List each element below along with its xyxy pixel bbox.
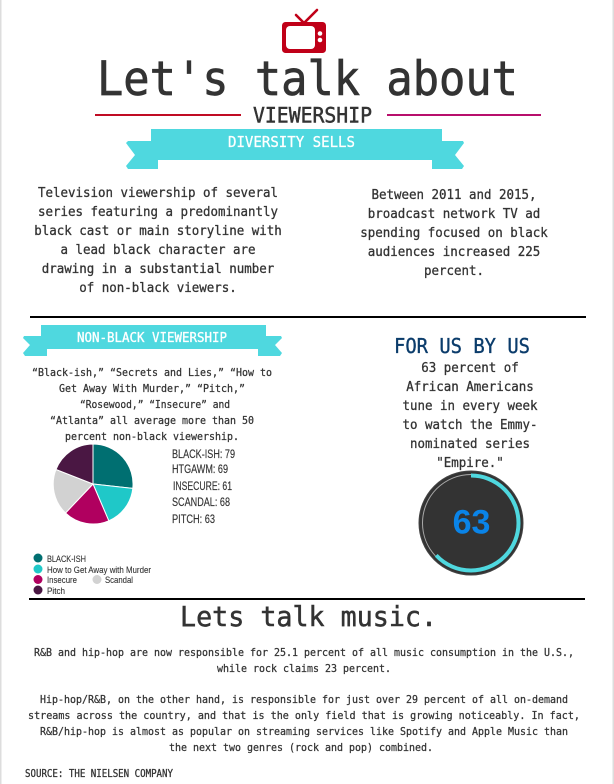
pie chart: non-black viewership (53, 444, 133, 524)
text block: music paragraph one: while rock claims 23 percent. (217, 662, 391, 675)
text block: empire: to watch the Emmy- (402, 417, 538, 433)
text block: television viewership: drawing in a substantial number (42, 261, 274, 277)
text block: non-black viewership series: percent non-black viewership. (65, 430, 239, 443)
text block: television viewership: Television viewership of several (38, 185, 278, 201)
source: SOURCE: THE NIELSEN COMPANY (25, 768, 174, 780)
ribbon: non-black viewership: NON-BLACK VIEWERSHIP (77, 331, 227, 346)
text block: ad spending: broadcast network TV ad (368, 206, 540, 222)
text block: non-black viewership series: “Black-ish,” “Secrets and Lies,” “How to (32, 366, 272, 379)
text block: television viewership (34, 185, 282, 296)
pie chart legend: BLACK-ISH (47, 554, 86, 564)
text block: empire: African Americans (406, 379, 534, 395)
subtitle: viewership with rules: VIEWERSHIP (253, 104, 372, 128)
heading: lets talk music: Lets talk music. (180, 600, 437, 633)
text block: ad spending: spending focused on black (360, 225, 548, 241)
text block: non-black viewership series: Get Away With Murder,” “Pitch,” (59, 382, 245, 395)
pie chart values: PITCH: 63 (172, 514, 215, 526)
text block: music paragraph two (28, 693, 580, 754)
text block: music paragraph two: streams across the country, and that is the only field that is growing noticeably. In fact, (28, 709, 580, 722)
pie chart legend (34, 554, 151, 596)
text block: music paragraph two: the next two genres (rock and pop) combined. (169, 741, 433, 754)
pie chart values (172, 449, 235, 526)
pie chart legend: Pitch (47, 586, 65, 596)
pie chart values: INSECURE: 61 (173, 481, 232, 493)
pie chart values: BLACK-ISH: 79 (172, 449, 235, 461)
text block: non-black viewership series: “Atlanta” all average more than 50 (50, 414, 254, 427)
text block: music paragraph one: R&B and hip-hop are now responsible for 25.1 percent of all music consumption in the U.S., (34, 646, 574, 659)
text block: non-black viewership series: “Rosewood,” “Insecure” and (80, 398, 230, 411)
ribbon: diversity sells (126, 129, 464, 169)
text block: music paragraph two: Hip-hop/R&B, on the other hand, is responsible for just over 29 percent of all on-demand (40, 693, 568, 706)
ribbon: non-black viewership (23, 325, 282, 356)
title: Let's talk about (97, 52, 518, 107)
ribbon: diversity sells: DIVERSITY SELLS (228, 133, 355, 151)
text block: non-black viewership series (32, 366, 272, 443)
text block: ad spending: audiences increased 225 (368, 244, 540, 260)
text block: empire: "Empire." (436, 455, 504, 471)
text block: ad spending: Between 2011 and 2015, (372, 187, 536, 203)
pie chart values: HTGAWM: 69 (172, 464, 228, 476)
text block: music paragraph two: R&B/hip-hop is almost as popular on streaming services like Spotify and Apple Music than (40, 725, 568, 738)
pie chart legend: How to Get Away with Murder (47, 565, 151, 575)
text block: television viewership: black cast or main storyline with (34, 223, 282, 239)
pie chart legend: Scandal (105, 575, 133, 585)
text block: television viewership: a lead black character are (60, 242, 256, 258)
text block: empire: 63 percent of (421, 360, 519, 376)
text block: music paragraph one (34, 646, 574, 675)
text block: empire: nominated series (410, 436, 530, 452)
pie chart legend: Insecure (47, 575, 77, 585)
gauge: 63 percent (419, 471, 523, 575)
text block: empire (402, 360, 538, 471)
text block: television viewership: of non-black viewers. (79, 280, 237, 296)
pie chart values: SCANDAL: 68 (172, 497, 230, 509)
gauge: 63 percent: 63 (453, 504, 490, 542)
text block: ad spending (360, 187, 548, 279)
text block: empire: tune in every week (402, 398, 538, 414)
icon: television (282, 10, 326, 53)
text block: ad spending: percent. (424, 263, 484, 279)
heading: for us by us: FOR US BY US (394, 334, 530, 358)
text block: television viewership: series featuring a predominantly (38, 204, 278, 220)
